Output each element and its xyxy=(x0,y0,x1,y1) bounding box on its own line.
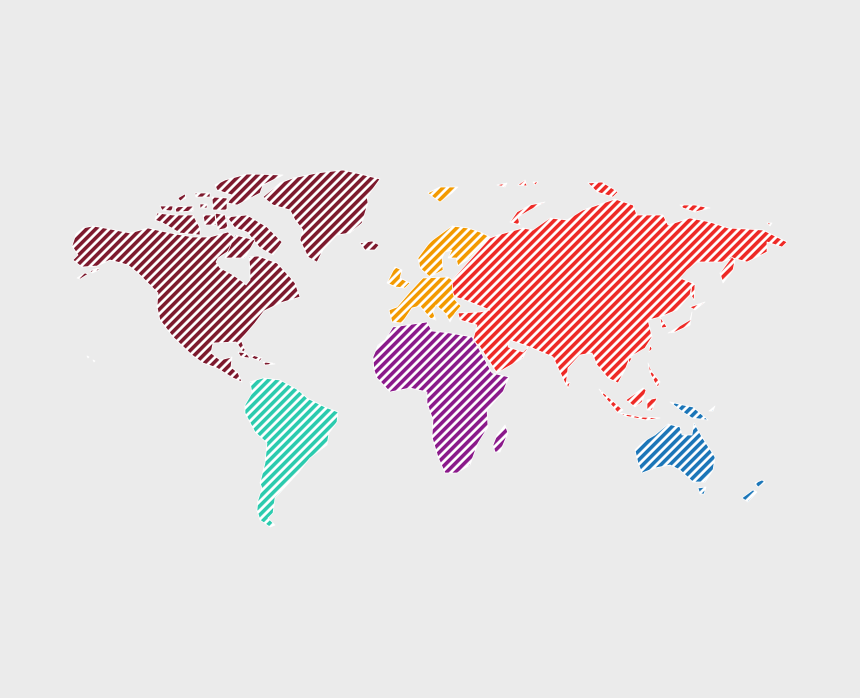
Africa xyxy=(373,322,509,473)
Oceania xyxy=(635,402,765,502)
Asia xyxy=(452,180,787,420)
South America xyxy=(245,378,338,527)
North America xyxy=(72,170,380,382)
Europe xyxy=(387,187,490,323)
